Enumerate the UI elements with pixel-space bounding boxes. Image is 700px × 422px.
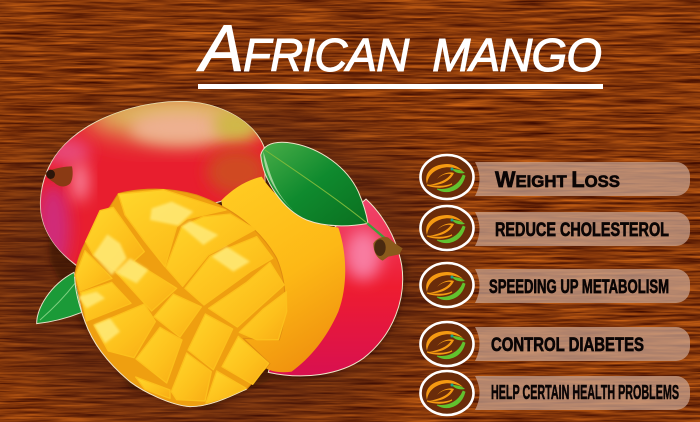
benefit row: Help Certain Health Problems	[420, 371, 690, 415]
icon: logo	[420, 322, 474, 366]
pill	[475, 269, 690, 303]
right mango skin	[268, 199, 403, 376]
cubes	[76, 190, 287, 403]
benefit row: Control Diabetes	[420, 322, 690, 366]
right mango highlights	[345, 230, 382, 280]
small leaf	[37, 272, 82, 324]
label: CONTROL DIABETES	[491, 335, 644, 356]
pill	[475, 376, 690, 410]
pill	[475, 327, 690, 361]
darker wood area behind fruit	[0, 70, 490, 422]
benefit row: Speeding Up Metabolism	[420, 263, 690, 307]
icon: logo	[420, 371, 474, 415]
fruit shadow	[47, 122, 407, 410]
stem left	[45, 166, 73, 186]
title underline	[198, 84, 603, 89]
cut mango cubes	[75, 189, 287, 407]
icon: logo	[420, 263, 474, 307]
back mango	[40, 101, 266, 266]
stem right	[373, 237, 403, 261]
icon: logo	[420, 206, 474, 250]
cube highlights	[78, 202, 250, 343]
icon: logo	[420, 155, 474, 199]
label: WEIGHT LOSS	[495, 167, 620, 192]
benefit row: Weight Loss	[420, 155, 690, 199]
cut mango outer rim	[75, 277, 247, 407]
pill	[475, 162, 690, 196]
title: AFRICAN MANGO	[196, 11, 602, 85]
right mango flesh	[221, 177, 345, 372]
illustration: mangoes	[37, 92, 407, 410]
benefit row: Reduce Cholesterol	[420, 206, 690, 250]
pill	[475, 212, 690, 246]
cut mango base	[75, 189, 285, 407]
leaf	[261, 142, 385, 238]
